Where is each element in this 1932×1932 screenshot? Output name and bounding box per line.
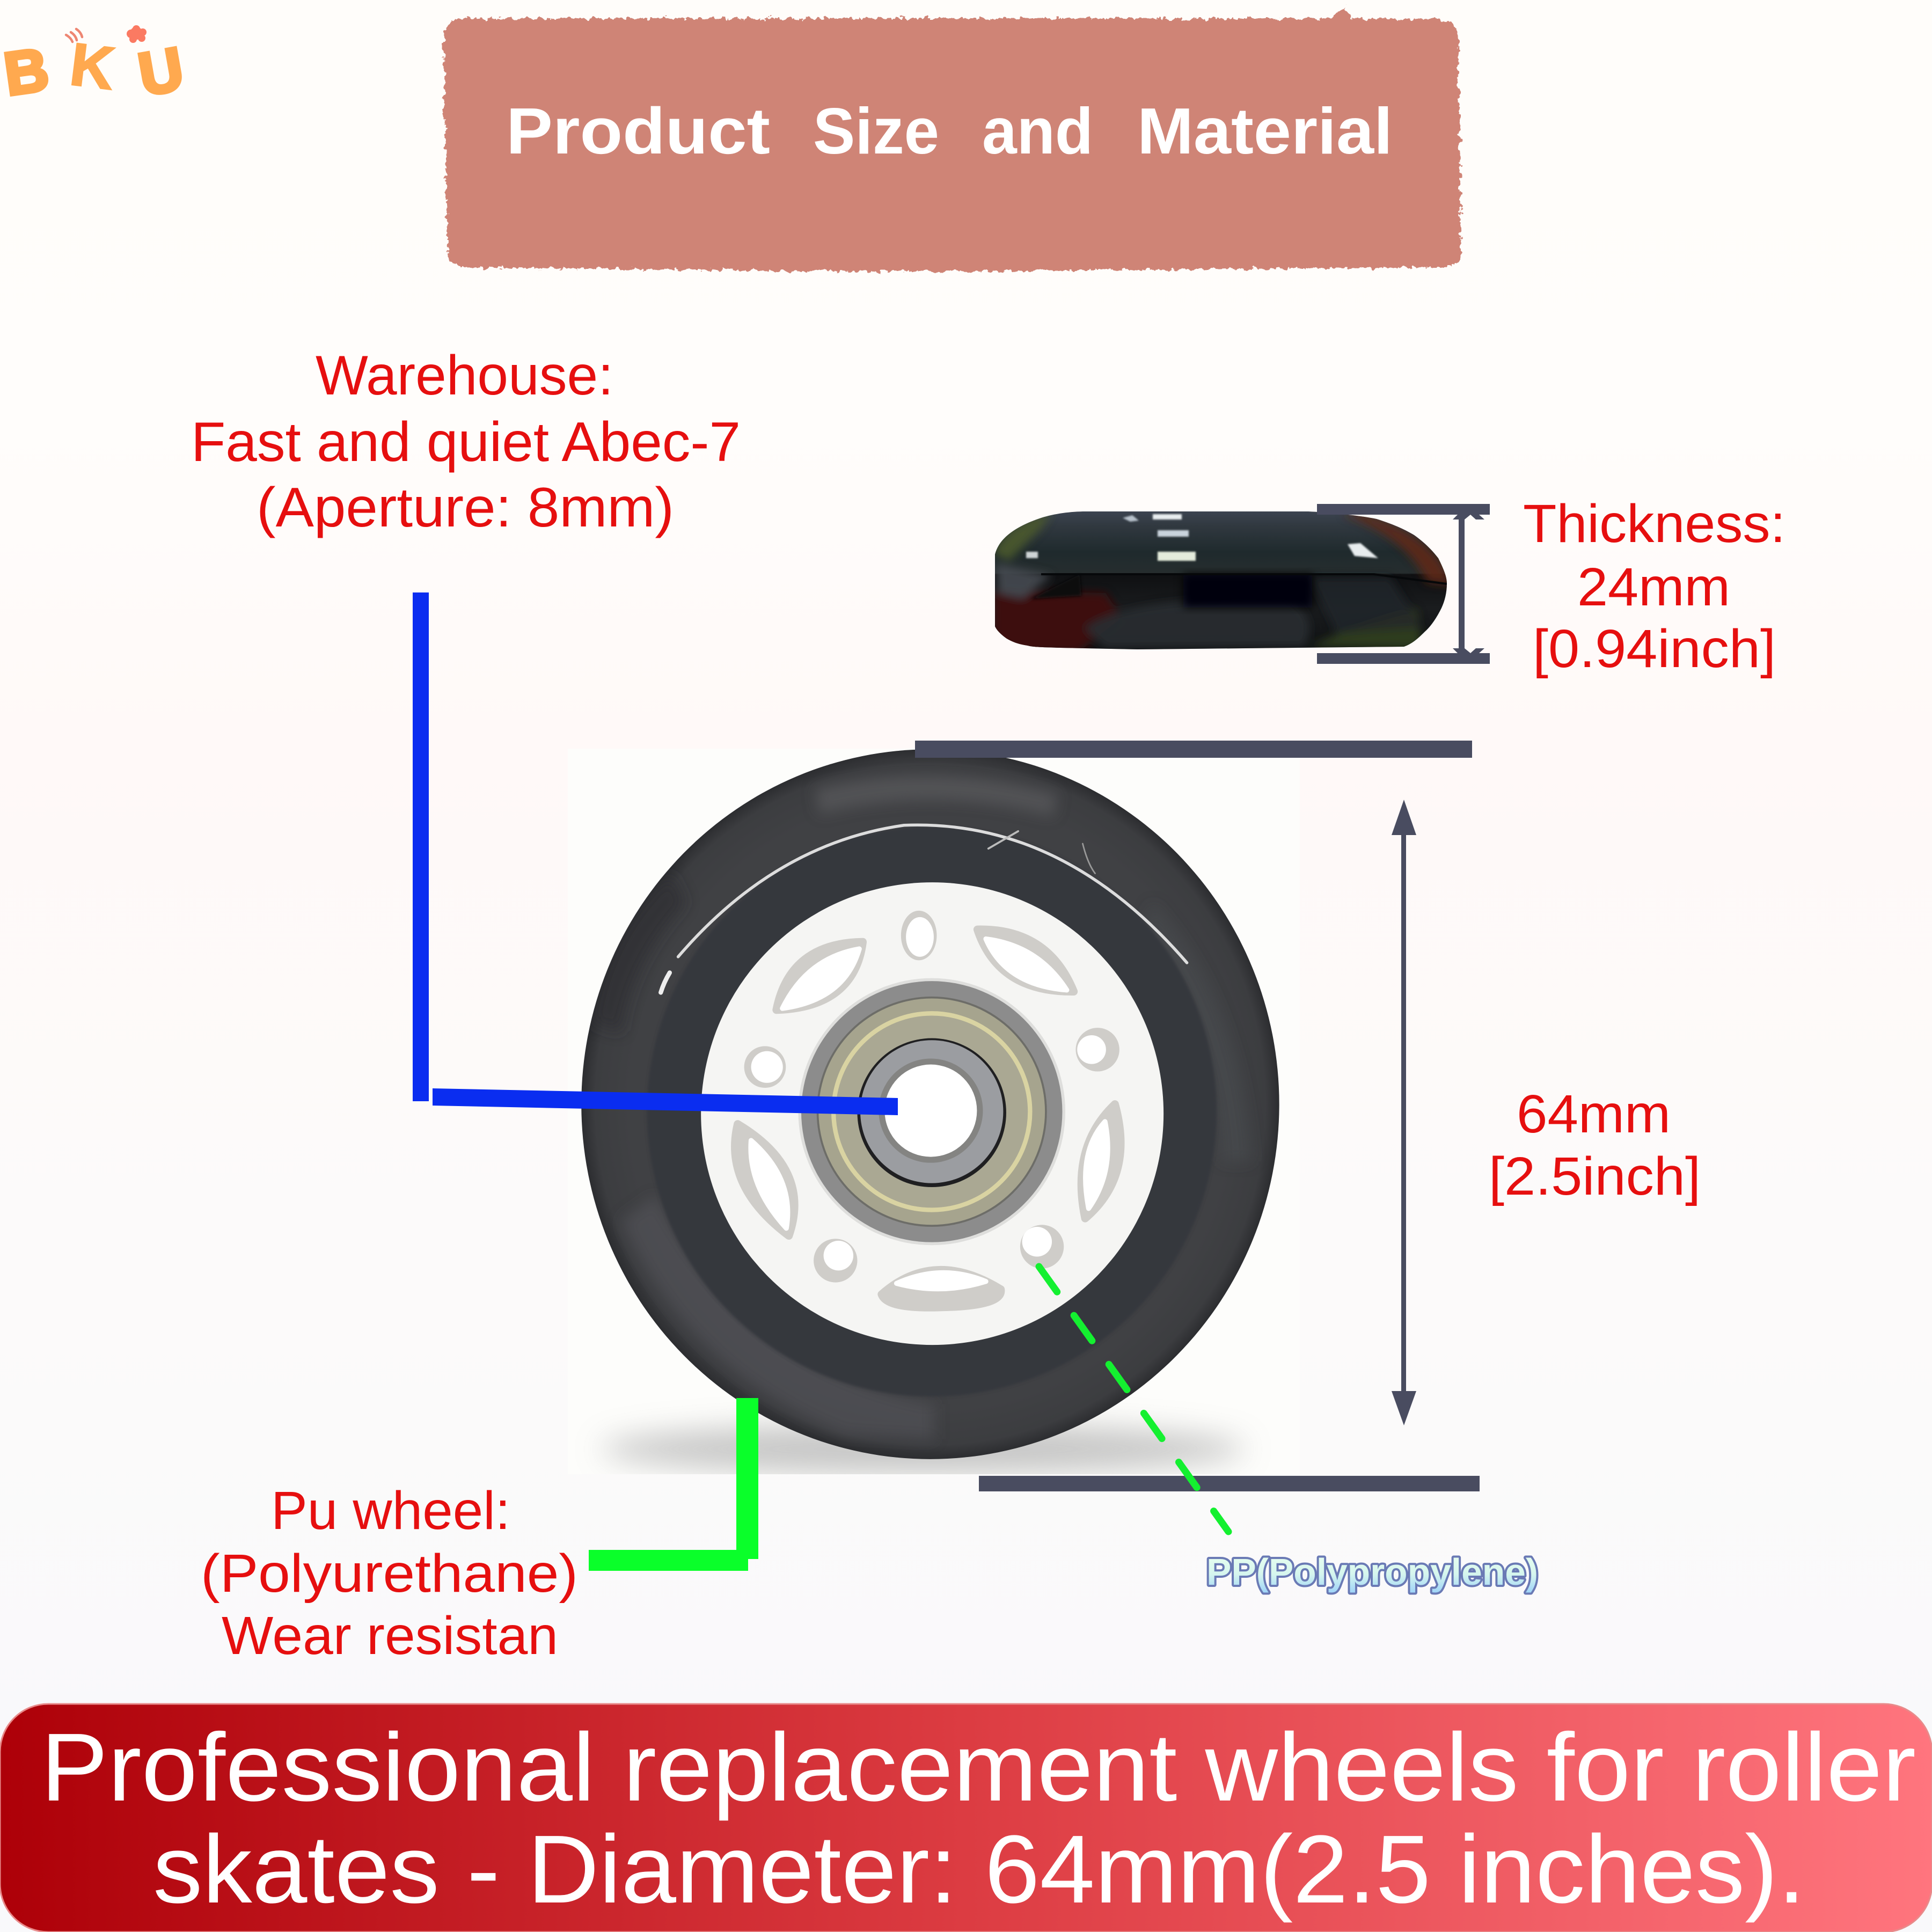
logo letter B: B <box>0 35 53 108</box>
photo backdrop <box>568 749 1300 1474</box>
banner title text: and <box>982 94 1093 167</box>
callout: PU wheel text: (Polyurethane) <box>201 1543 578 1604</box>
bottom banner text: skates - Diameter: 64mm(2.5 inches). <box>153 1816 1805 1923</box>
tire tone patches <box>591 775 1252 1439</box>
callout: thickness text: Thickness: <box>1523 494 1785 554</box>
logo flower <box>127 25 147 43</box>
banner title text <box>506 94 1393 167</box>
tire highlight arc <box>661 825 1187 992</box>
title banner <box>443 6 1461 272</box>
logo sound arcs <box>66 29 82 42</box>
callout: PU wheel text: Pu wheel: <box>271 1481 510 1541</box>
callout: thickness text: [0.94inch] <box>1533 619 1776 679</box>
callout: polypropylene label: PP(Polypropylene) <box>1206 1551 1538 1593</box>
banner shape <box>443 6 1461 272</box>
logo: BKU <box>0 25 188 108</box>
tire <box>581 749 1279 1459</box>
side wheel body <box>993 510 1452 652</box>
callout: diameter text <box>1489 1084 1701 1206</box>
bearing <box>798 978 1065 1245</box>
logo letter U: U <box>134 35 188 108</box>
inner tread <box>647 827 1217 1396</box>
callout: PU wheel text: Wear resistan <box>222 1606 558 1666</box>
bottom banner text: Professional replacement wheels for roller <box>41 1714 1916 1821</box>
side view wheel photo <box>993 510 1452 652</box>
ground shadow <box>601 1424 1245 1474</box>
green leader line to tire <box>589 1398 758 1571</box>
callout: warehouse bearing text <box>191 345 741 539</box>
callout: warehouse bearing text: Fast and quiet Abec-7 <box>191 411 741 473</box>
bottom banner text <box>41 1714 1916 1923</box>
banner title text: Size <box>813 94 939 167</box>
green dashed leader line to hub <box>1039 1267 1228 1532</box>
side wheel highlights <box>1026 514 1378 561</box>
callout: thickness text <box>1523 494 1785 679</box>
diameter dimension bars and arrow <box>915 741 1480 1491</box>
callout: warehouse bearing text: Warehouse: <box>316 345 613 407</box>
callout: diameter text: 64mm <box>1517 1084 1671 1144</box>
callout: thickness text: 24mm <box>1577 557 1730 617</box>
callout: warehouse bearing text: (Aperture: 8mm) <box>257 477 674 539</box>
thickness dimension bracket <box>1317 504 1490 664</box>
bottom banner <box>0 1704 1932 1932</box>
logo letter K: K <box>67 31 118 102</box>
reflections on the side wheel <box>993 513 1452 652</box>
banner title text: Material <box>1137 94 1393 167</box>
bottom banner background <box>0 1704 1932 1932</box>
blue leader line to bearing <box>413 592 898 1115</box>
hub round holes <box>744 911 1119 1283</box>
hub slots <box>735 930 1121 1307</box>
hub <box>701 882 1163 1345</box>
front view wheel photo <box>568 749 1300 1474</box>
banner title text: Product <box>506 94 770 167</box>
callout: PU wheel text <box>201 1481 578 1666</box>
callout: diameter text: [2.5inch] <box>1489 1146 1701 1206</box>
